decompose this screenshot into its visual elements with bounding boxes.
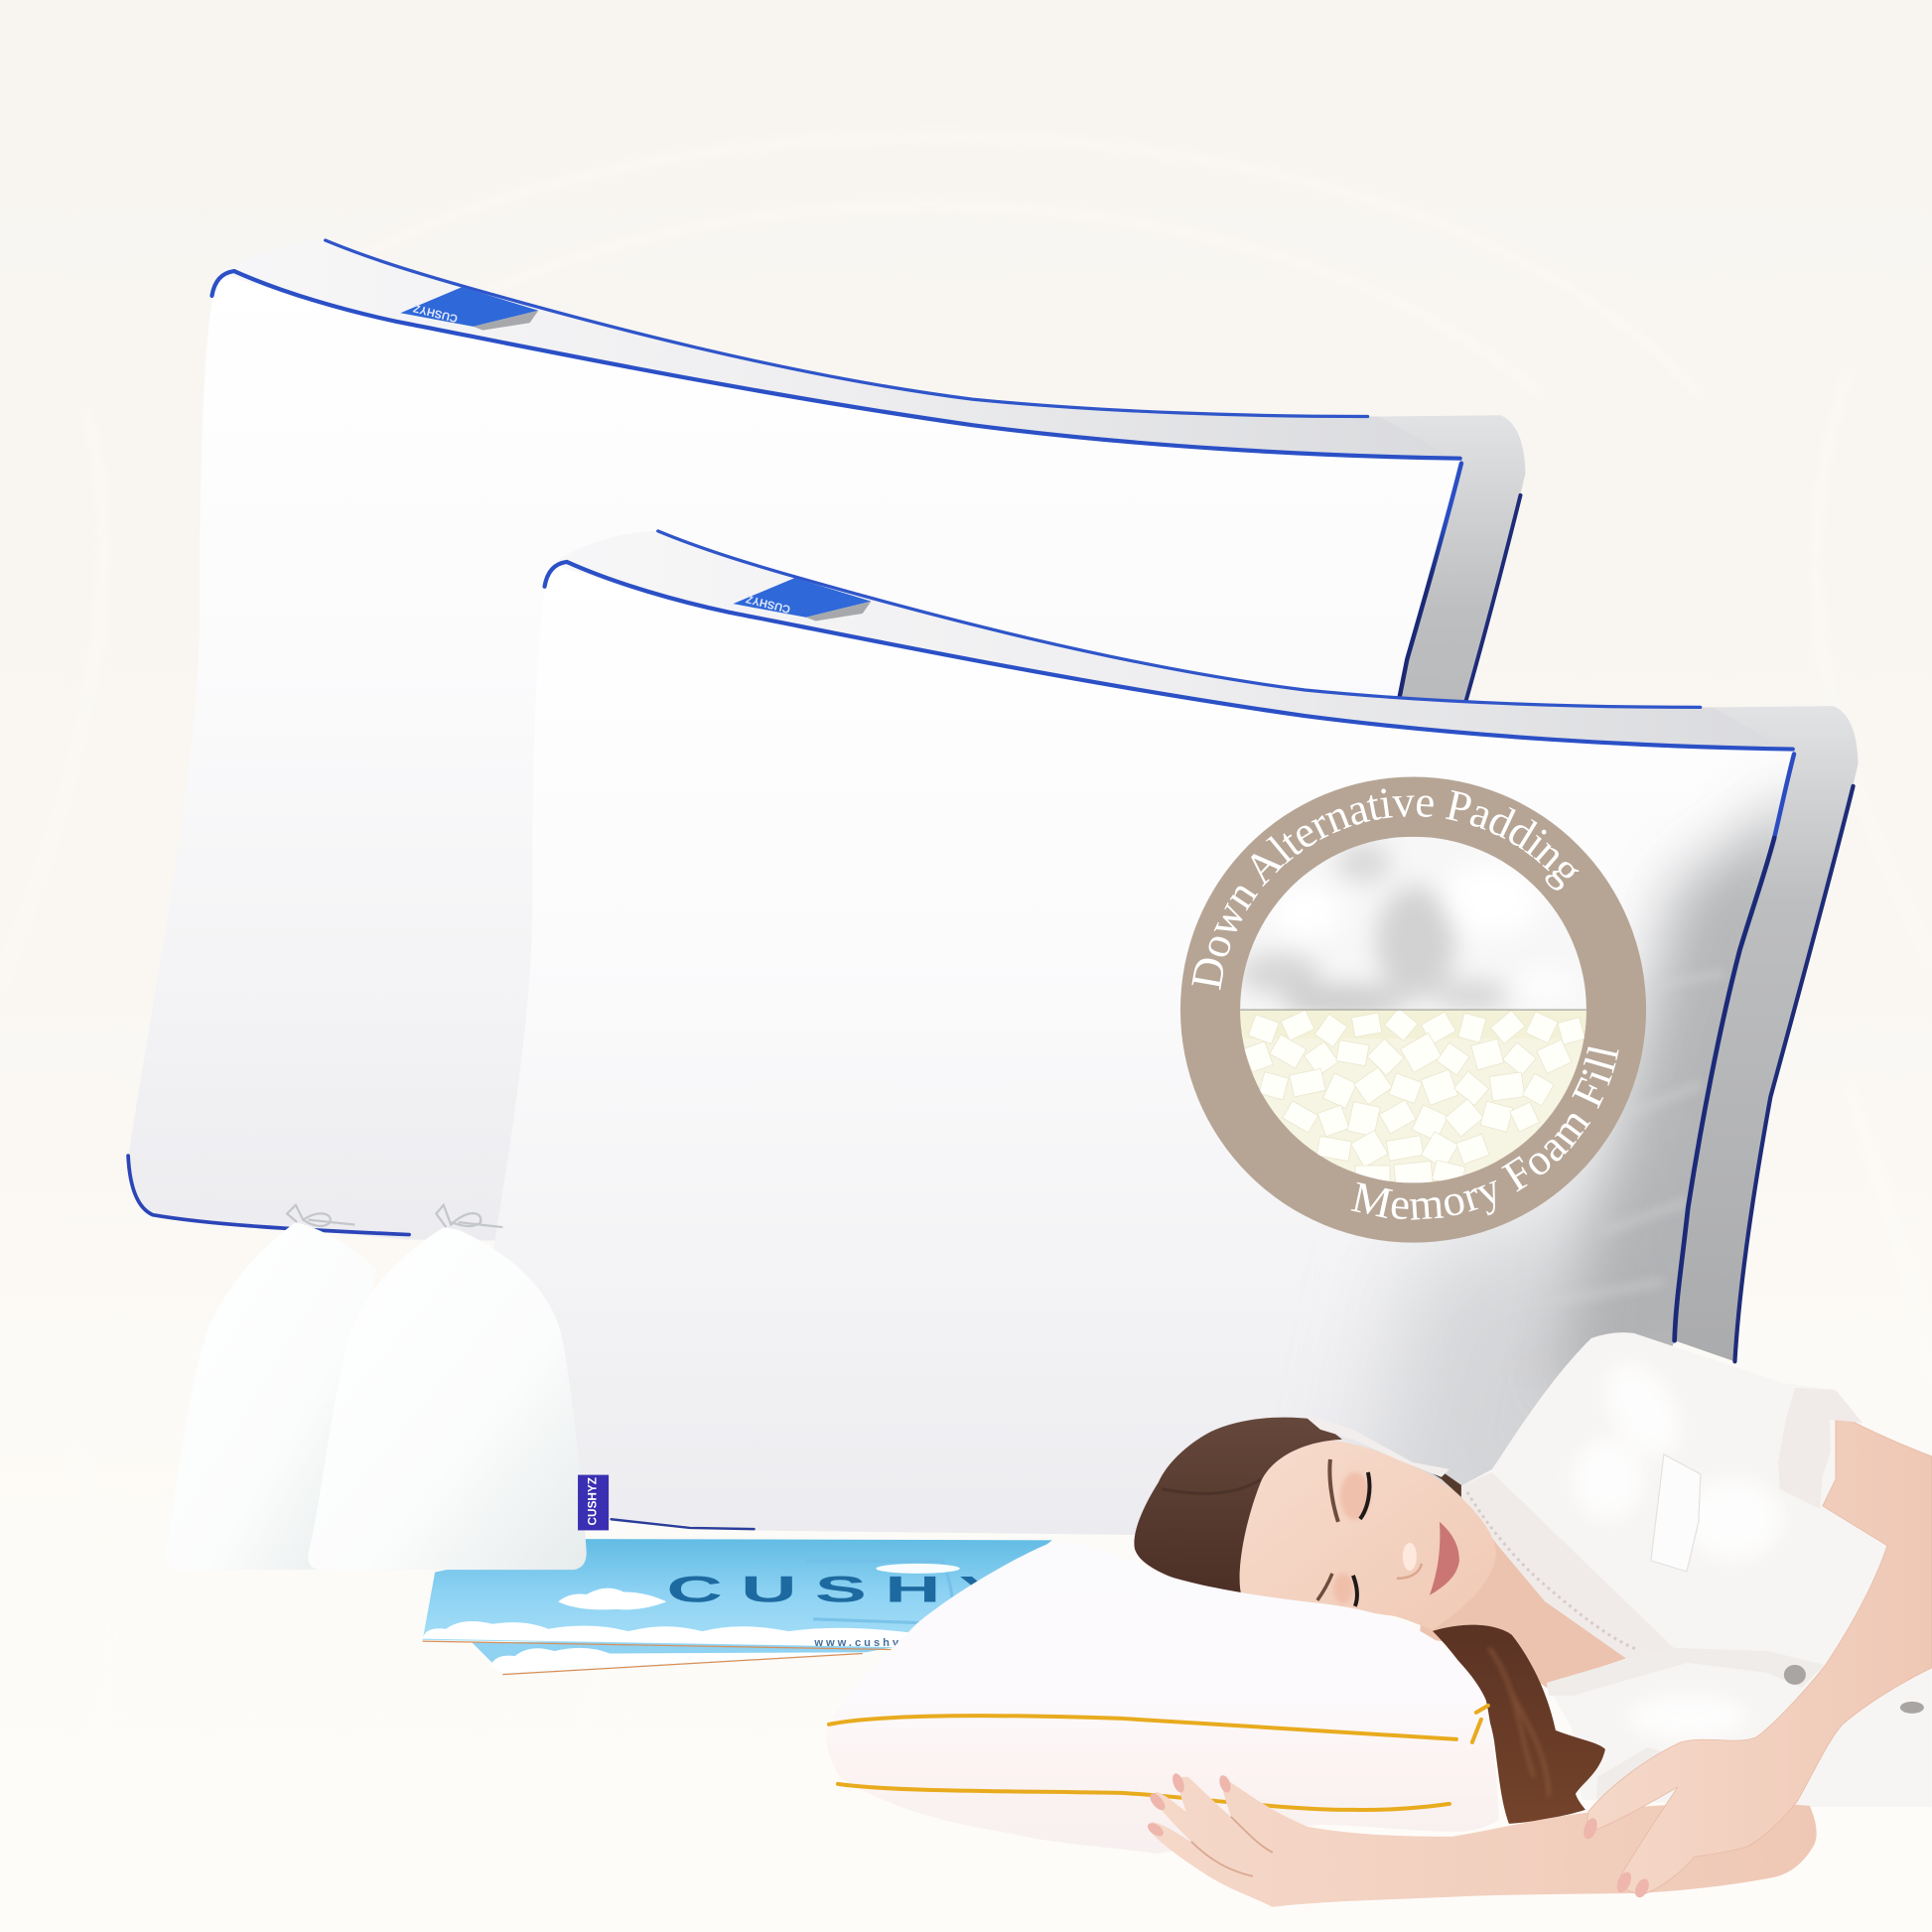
back pillow brand tag: CUSHYZ (412, 302, 459, 324)
card logo frame (807, 1561, 953, 1624)
shirt pocket (1651, 1454, 1701, 1572)
front pillow top gusset (552, 531, 1793, 750)
woman sleeping on pillow (826, 1332, 1932, 1907)
front pillow brand tag (733, 578, 871, 621)
small pillow (826, 1543, 1499, 1854)
top hair (1134, 1418, 1461, 1593)
front pillow with blue piping (461, 531, 1859, 1565)
upper arm, forearm and resting hand (1586, 1413, 1932, 1895)
front pillow side gusset (1675, 706, 1859, 1361)
back pillow with blue piping (128, 240, 1525, 1249)
bag label (578, 1475, 609, 1530)
badge ring (1180, 776, 1646, 1243)
badge text: down alternative padding: Down Alternative Padding (1191, 788, 1579, 991)
brand cards (423, 1539, 1094, 1675)
long hair (1433, 1625, 1605, 1824)
shirt buttons (1784, 1665, 1924, 1714)
sleeve lace (1778, 1388, 1863, 1509)
back pillow piping (128, 240, 1520, 1235)
face (1240, 1440, 1496, 1630)
front pillow piping (545, 531, 1854, 1529)
badge: fill materials (1179, 776, 1646, 1243)
under sleeve lace (1596, 1747, 1664, 1799)
hair highlights (1489, 1648, 1549, 1797)
storage bags (165, 1205, 609, 1570)
down alternative padding photo (1240, 836, 1587, 1010)
front pillow face (461, 564, 1794, 1540)
facial features (1317, 1459, 1459, 1606)
badge text: memory foam fill: Memory Foam Fill (1350, 1046, 1619, 1220)
hugging arm and hand (1152, 1777, 1817, 1907)
back pillow top gusset (219, 240, 1460, 459)
left bag (165, 1205, 376, 1570)
front pillow brand tag: CUSHYZ (745, 593, 791, 615)
back pillow front face (128, 274, 1461, 1249)
right bag (308, 1205, 587, 1570)
headband (1301, 1413, 1449, 1477)
shirt satin highlights (1574, 1352, 1782, 1739)
back pillow brand tag (400, 287, 538, 331)
badge divider line (1240, 1009, 1587, 1011)
back pillow side gusset (1342, 415, 1525, 1070)
card logo: CUSHYZ (666, 1569, 1094, 1609)
small pillow yellow piping (829, 1706, 1488, 1810)
memory foam fill photo (1232, 1008, 1595, 1187)
card logo cloud (876, 1564, 960, 1574)
upper card (423, 1539, 1094, 1650)
bag label: CUSHYZ (587, 1477, 600, 1525)
lace collar (1455, 1472, 1674, 1660)
front pillow right shading (1354, 780, 1785, 1489)
finger nails (1146, 1772, 1652, 1899)
neck and chest (1420, 1489, 1628, 1688)
lower collar lace (1547, 1648, 1825, 1696)
card url: www.cushyz.com (813, 1637, 948, 1649)
nightshirt (1455, 1332, 1932, 1807)
lower card (472, 1639, 936, 1675)
